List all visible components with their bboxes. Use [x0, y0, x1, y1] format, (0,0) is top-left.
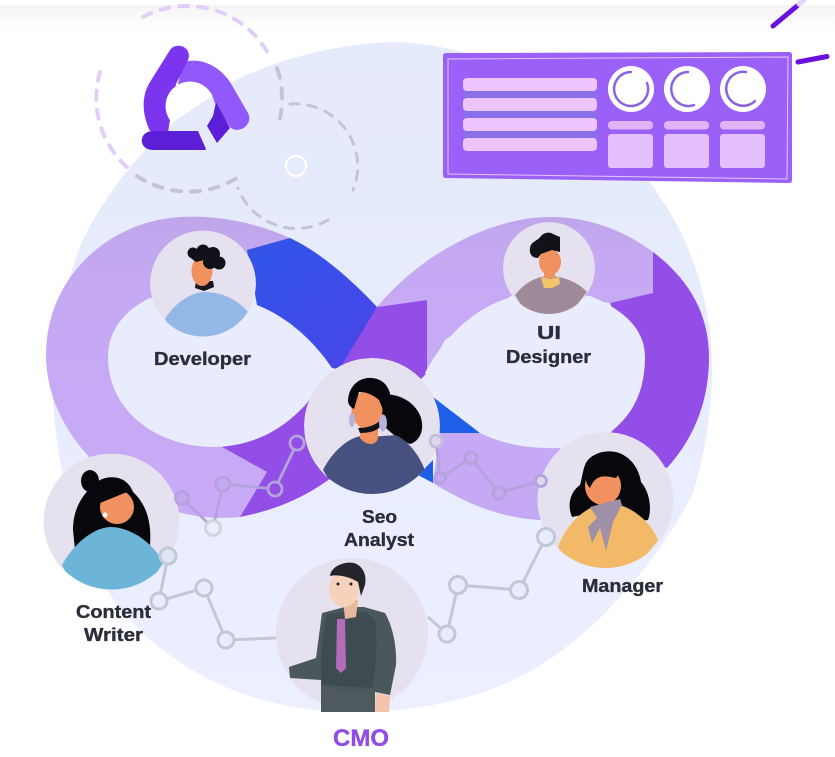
jaw shadow: [358, 421, 380, 433]
avatar: Seo Analyst: [304, 358, 440, 505]
bottom bar: [142, 131, 206, 150]
infinity loop: [46, 217, 709, 520]
label: CMO: CMO: [333, 725, 389, 752]
line chart: upper right: [430, 435, 546, 499]
vest: [321, 612, 376, 688]
face: [585, 475, 621, 504]
left lobe lavender: [46, 217, 290, 518]
hair cap: [348, 378, 391, 412]
left blue segment: [247, 238, 377, 370]
hair: [570, 451, 650, 520]
small dark wedge: [207, 102, 230, 143]
bottom right lavender: [433, 433, 560, 520]
shadow between lines: [463, 88, 597, 140]
line chart: lower left: [151, 548, 276, 648]
neck: [343, 600, 358, 619]
earrings: [379, 414, 387, 432]
label: Content Writer: [76, 602, 151, 645]
neck: [360, 425, 378, 444]
right hole: [425, 296, 645, 448]
avatar: UI Designer: [503, 222, 595, 320]
left hole: [108, 298, 332, 447]
tie: [336, 619, 346, 673]
content tiles: [608, 134, 765, 168]
line chart: upper left: [176, 436, 304, 536]
bun: [81, 470, 99, 492]
text lines: [463, 78, 597, 151]
hand: [375, 693, 390, 712]
label: Seo Analyst: Seo: [362, 507, 397, 527]
avatar: Content Writer: [44, 454, 180, 600]
face: [352, 391, 382, 429]
right blue wedges: [425, 390, 480, 433]
label: Seo Analyst: Analyst: [344, 530, 414, 550]
jacket: [289, 607, 396, 712]
fringe: [100, 490, 126, 503]
gauge dials: [608, 66, 766, 112]
dashed orbit circles: [96, 6, 358, 229]
label: Developer: Developer: [154, 349, 251, 369]
dark left arm: [144, 46, 189, 132]
label: Content Writer: Writer: [84, 625, 143, 645]
fringe: [586, 467, 618, 488]
hair: [73, 477, 150, 550]
hair: [330, 563, 366, 596]
ponytail: [380, 394, 422, 444]
label: Content Writer: Content: [76, 602, 151, 622]
label: UI Designer: [506, 323, 591, 367]
line chart: lower right: [428, 528, 554, 642]
shirt: [558, 504, 658, 568]
light arc: [178, 61, 249, 130]
left bottom purple: [222, 365, 360, 517]
small ring marker: [286, 156, 306, 176]
right lobe lavender: [377, 217, 653, 373]
label: UI Designer: Designer: [506, 347, 591, 367]
small tabs: [608, 121, 765, 130]
avatar: Manager: [538, 432, 674, 575]
shirt: [62, 527, 162, 590]
label: Seo Analyst: [344, 507, 414, 550]
panel: dashboard card: [443, 52, 792, 183]
avatar: Developer: [150, 230, 256, 345]
right purple: [600, 252, 709, 468]
icon: logo: [142, 46, 249, 150]
background blob: [53, 42, 712, 712]
center purple: [340, 300, 427, 400]
center hole: [166, 82, 214, 130]
head: [329, 571, 359, 607]
body: [323, 435, 424, 494]
scarf: [588, 499, 622, 551]
face: [100, 490, 134, 524]
label: UI Designer: UI: [537, 323, 561, 343]
top shadow band: [0, 5, 835, 31]
decorative rays: [773, 0, 827, 62]
avatar: CMO: [276, 558, 428, 712]
trousers: [321, 686, 375, 712]
label: Manager: Manager: [582, 576, 663, 596]
